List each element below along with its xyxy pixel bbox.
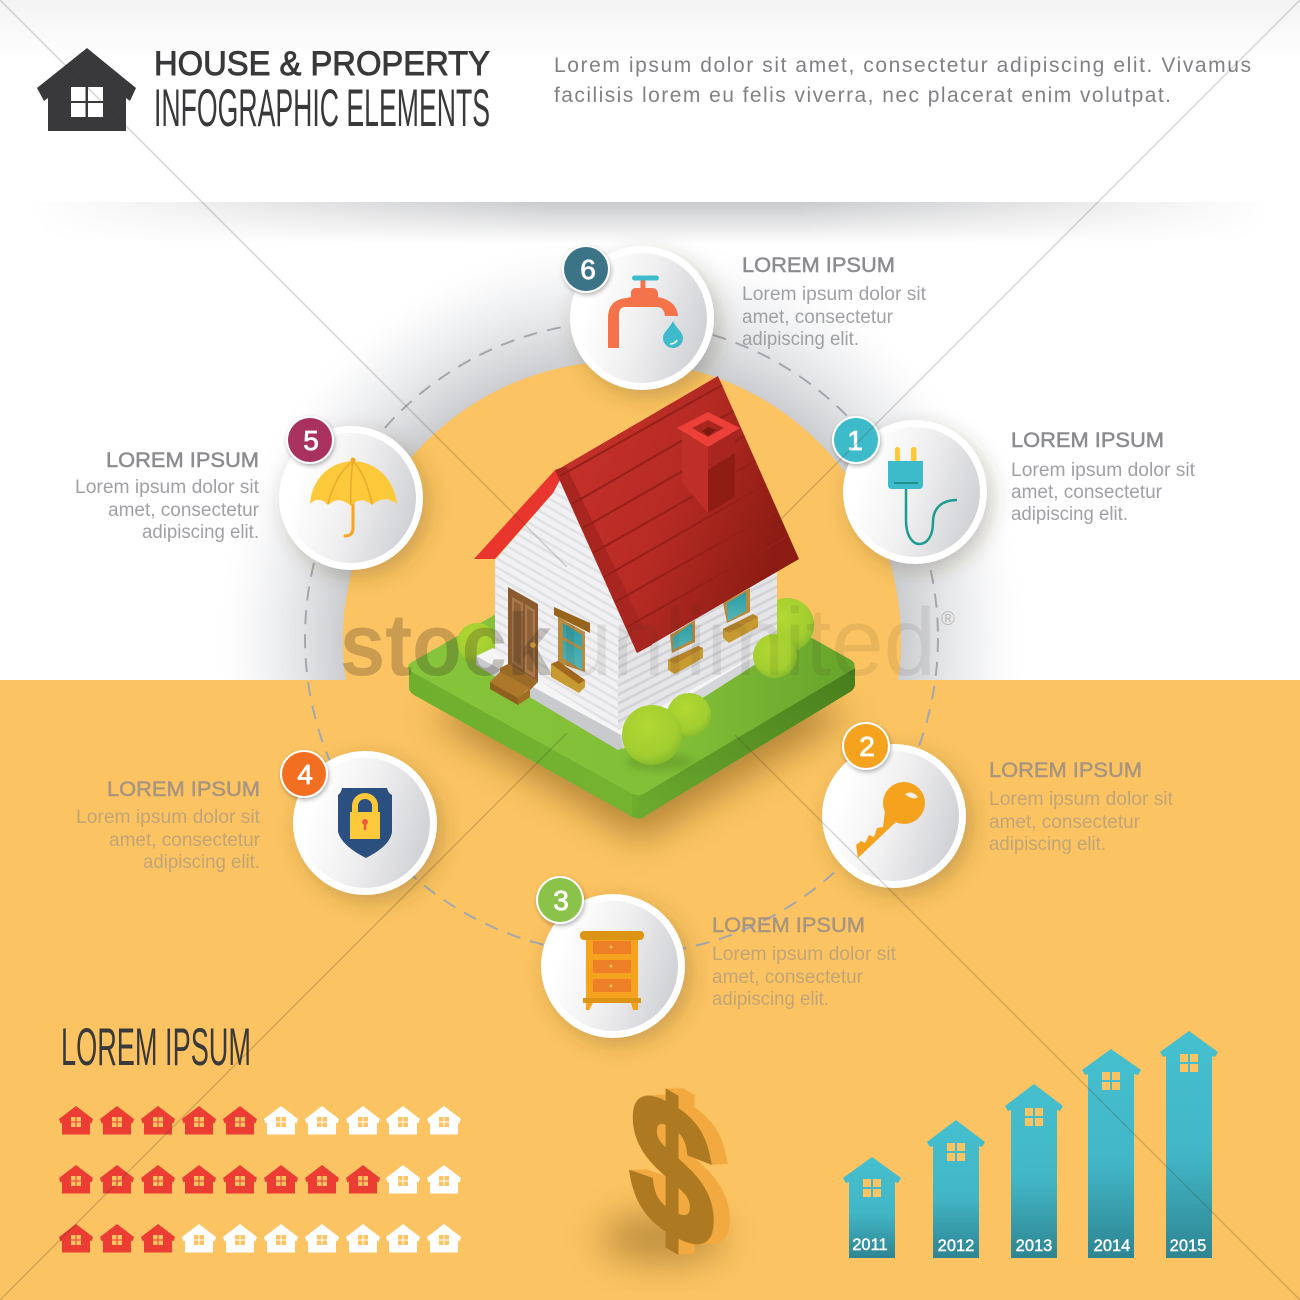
text block 2: Lorem ipsum dolor sit bbox=[989, 789, 1174, 810]
feature circle 4: shield bbox=[280, 750, 437, 895]
badge 5 bbox=[286, 416, 334, 464]
bar 2011: 2011 bbox=[852, 1236, 888, 1254]
text block 6: adipiscing elit. bbox=[742, 329, 859, 350]
title: INFOGRAPHIC ELEMENTS bbox=[154, 79, 490, 138]
bar 2011 bbox=[843, 1157, 901, 1258]
text block 6: Lorem ipsum dolor sit bbox=[742, 284, 927, 305]
watermark: unlimited bbox=[560, 589, 936, 696]
icon: shield with padlock bbox=[338, 788, 392, 858]
pictogram chart: houses bbox=[59, 1106, 461, 1252]
feature circle 1: plug bbox=[832, 416, 987, 564]
side windows bbox=[668, 588, 758, 674]
text block 4: LOREM IPSUM bbox=[107, 778, 260, 801]
header intro text bbox=[554, 54, 1251, 107]
text block 2: adipiscing elit. bbox=[989, 834, 1106, 855]
text block 5: LOREM IPSUM bbox=[106, 449, 259, 472]
red roof bbox=[555, 376, 799, 653]
text block 5: Lorem ipsum dolor sit bbox=[75, 477, 260, 498]
text block 4: Lorem ipsum dolor sit bbox=[76, 807, 261, 828]
text block 5: amet, consectetur bbox=[108, 500, 260, 521]
text block 1 bbox=[1011, 429, 1196, 525]
text block 3: adipiscing elit. bbox=[712, 989, 829, 1010]
gray halo around sun bbox=[251, 274, 994, 680]
icon: faucet bbox=[608, 276, 683, 348]
icon: key bbox=[856, 782, 925, 858]
feature circle 5: umbrella bbox=[279, 416, 423, 570]
text block 4: adipiscing elit. bbox=[143, 852, 260, 873]
foundation bbox=[476, 645, 762, 750]
bar 2013 bbox=[1005, 1084, 1063, 1258]
text block 5 bbox=[75, 449, 260, 543]
text block 1: adipiscing elit. bbox=[1011, 504, 1128, 525]
chimney bbox=[677, 412, 740, 513]
bar 2012 bbox=[927, 1120, 985, 1258]
feature circle 3: cabinet bbox=[536, 876, 685, 1038]
badge 1: 1 bbox=[847, 425, 863, 456]
text block 6: amet, consectetur bbox=[742, 307, 894, 328]
icon: plug bbox=[888, 447, 957, 544]
badge 6 bbox=[562, 245, 610, 293]
badge 3: 3 bbox=[553, 885, 569, 916]
watermark: ® bbox=[941, 609, 955, 630]
bar 2013: 2013 bbox=[1016, 1237, 1052, 1255]
bushes behind house bbox=[457, 598, 814, 663]
bar chart: house towers by year bbox=[843, 1031, 1218, 1258]
text block 1: amet, consectetur bbox=[1011, 482, 1163, 503]
bar 2015: 2015 bbox=[1170, 1237, 1206, 1255]
badge 3 bbox=[536, 876, 584, 924]
yellow lower panel bbox=[0, 680, 1300, 1300]
row 3: 3 of 10 bbox=[59, 1224, 461, 1252]
front wall bbox=[495, 470, 645, 730]
row 2: 8 of 10 bbox=[59, 1165, 461, 1194]
badge 6: 6 bbox=[580, 254, 596, 285]
bar 2014 bbox=[1082, 1049, 1141, 1258]
icon: umbrella bbox=[310, 458, 397, 536]
title bbox=[154, 45, 490, 138]
text block 5: adipiscing elit. bbox=[142, 522, 259, 543]
header intro text: facilisis lorem eu felis viverra, nec placerat enim volutpat. bbox=[554, 84, 1171, 107]
text block 3: amet, consectetur bbox=[712, 967, 864, 988]
text block 4: amet, consectetur bbox=[109, 830, 261, 851]
yellow semicircle bbox=[343, 361, 901, 919]
icon: 3D dollar sign: $ bbox=[630, 1042, 713, 1299]
bar 2014: 2014 bbox=[1094, 1237, 1130, 1255]
grass base bbox=[408, 538, 855, 818]
bushes in front bbox=[622, 634, 797, 771]
text block 2 bbox=[989, 759, 1174, 855]
bar 2012: 2012 bbox=[938, 1237, 974, 1255]
badge 5: 5 bbox=[303, 425, 319, 456]
door steps bbox=[490, 664, 538, 705]
text block 6: LOREM IPSUM bbox=[742, 254, 895, 277]
title: HOUSE & PROPERTY bbox=[154, 45, 490, 83]
text block 3 bbox=[712, 914, 897, 1010]
text block 4 bbox=[76, 778, 261, 873]
badge 4: 4 bbox=[297, 759, 313, 790]
dollar shadow bbox=[600, 1214, 724, 1262]
ground shadow bbox=[430, 640, 850, 840]
badge 2 bbox=[842, 722, 890, 770]
header icon: house bbox=[37, 48, 136, 131]
isometric house bbox=[408, 376, 855, 818]
gable trim bbox=[474, 470, 560, 559]
text block 6 bbox=[742, 254, 927, 350]
bar 2015 bbox=[1160, 1031, 1218, 1258]
text block 3: LOREM IPSUM bbox=[712, 914, 865, 937]
text block 2: LOREM IPSUM bbox=[989, 759, 1142, 782]
row 1: 5 of 10 bbox=[59, 1106, 461, 1134]
dashed ring connecting items bbox=[305, 322, 938, 954]
badge 4 bbox=[280, 750, 328, 798]
page background bbox=[0, 0, 1300, 238]
text block 3: Lorem ipsum dolor sit bbox=[712, 944, 897, 965]
front window bbox=[551, 607, 590, 693]
watermark: stock bbox=[340, 595, 553, 694]
chart heading: LOREM IPSUM bbox=[61, 1018, 251, 1077]
text block 2: amet, consectetur bbox=[989, 812, 1141, 833]
badge 2: 2 bbox=[859, 731, 875, 762]
feature circle 6: faucet bbox=[562, 245, 714, 390]
icon: bedside cabinet bbox=[580, 931, 644, 1010]
side wall bbox=[618, 555, 777, 730]
text block 1: LOREM IPSUM bbox=[1011, 429, 1164, 452]
header intro text: Lorem ipsum dolor sit amet, consectetur adipiscing elit. Vivamus bbox=[554, 54, 1251, 77]
feature circle 2: key bbox=[822, 722, 966, 888]
badge 1 bbox=[832, 416, 880, 464]
door bbox=[508, 587, 538, 682]
text block 1: Lorem ipsum dolor sit bbox=[1011, 460, 1196, 481]
